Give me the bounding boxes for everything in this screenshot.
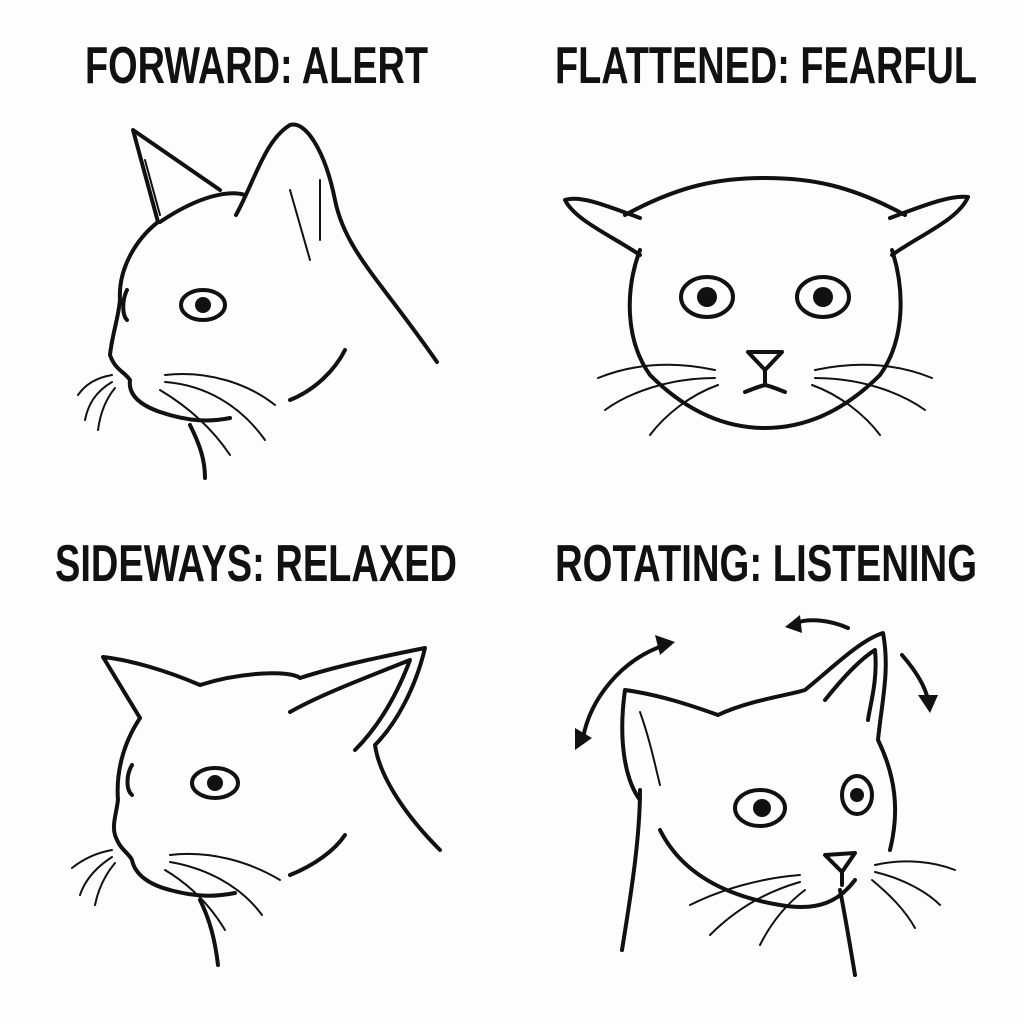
arrow: top <box>785 615 848 633</box>
title: forward alert: FORWARD: ALERT <box>85 37 428 95</box>
arrow: right <box>902 655 938 713</box>
cat: rotating listening <box>622 633 955 975</box>
arrow: left curved double <box>575 635 675 750</box>
title: sideways relaxed: SIDEWAYS: RELAXED <box>55 535 457 593</box>
cat: flattened fearful <box>565 178 968 435</box>
cat: sideways relaxed <box>72 648 440 965</box>
cat: forward alert <box>78 124 437 478</box>
